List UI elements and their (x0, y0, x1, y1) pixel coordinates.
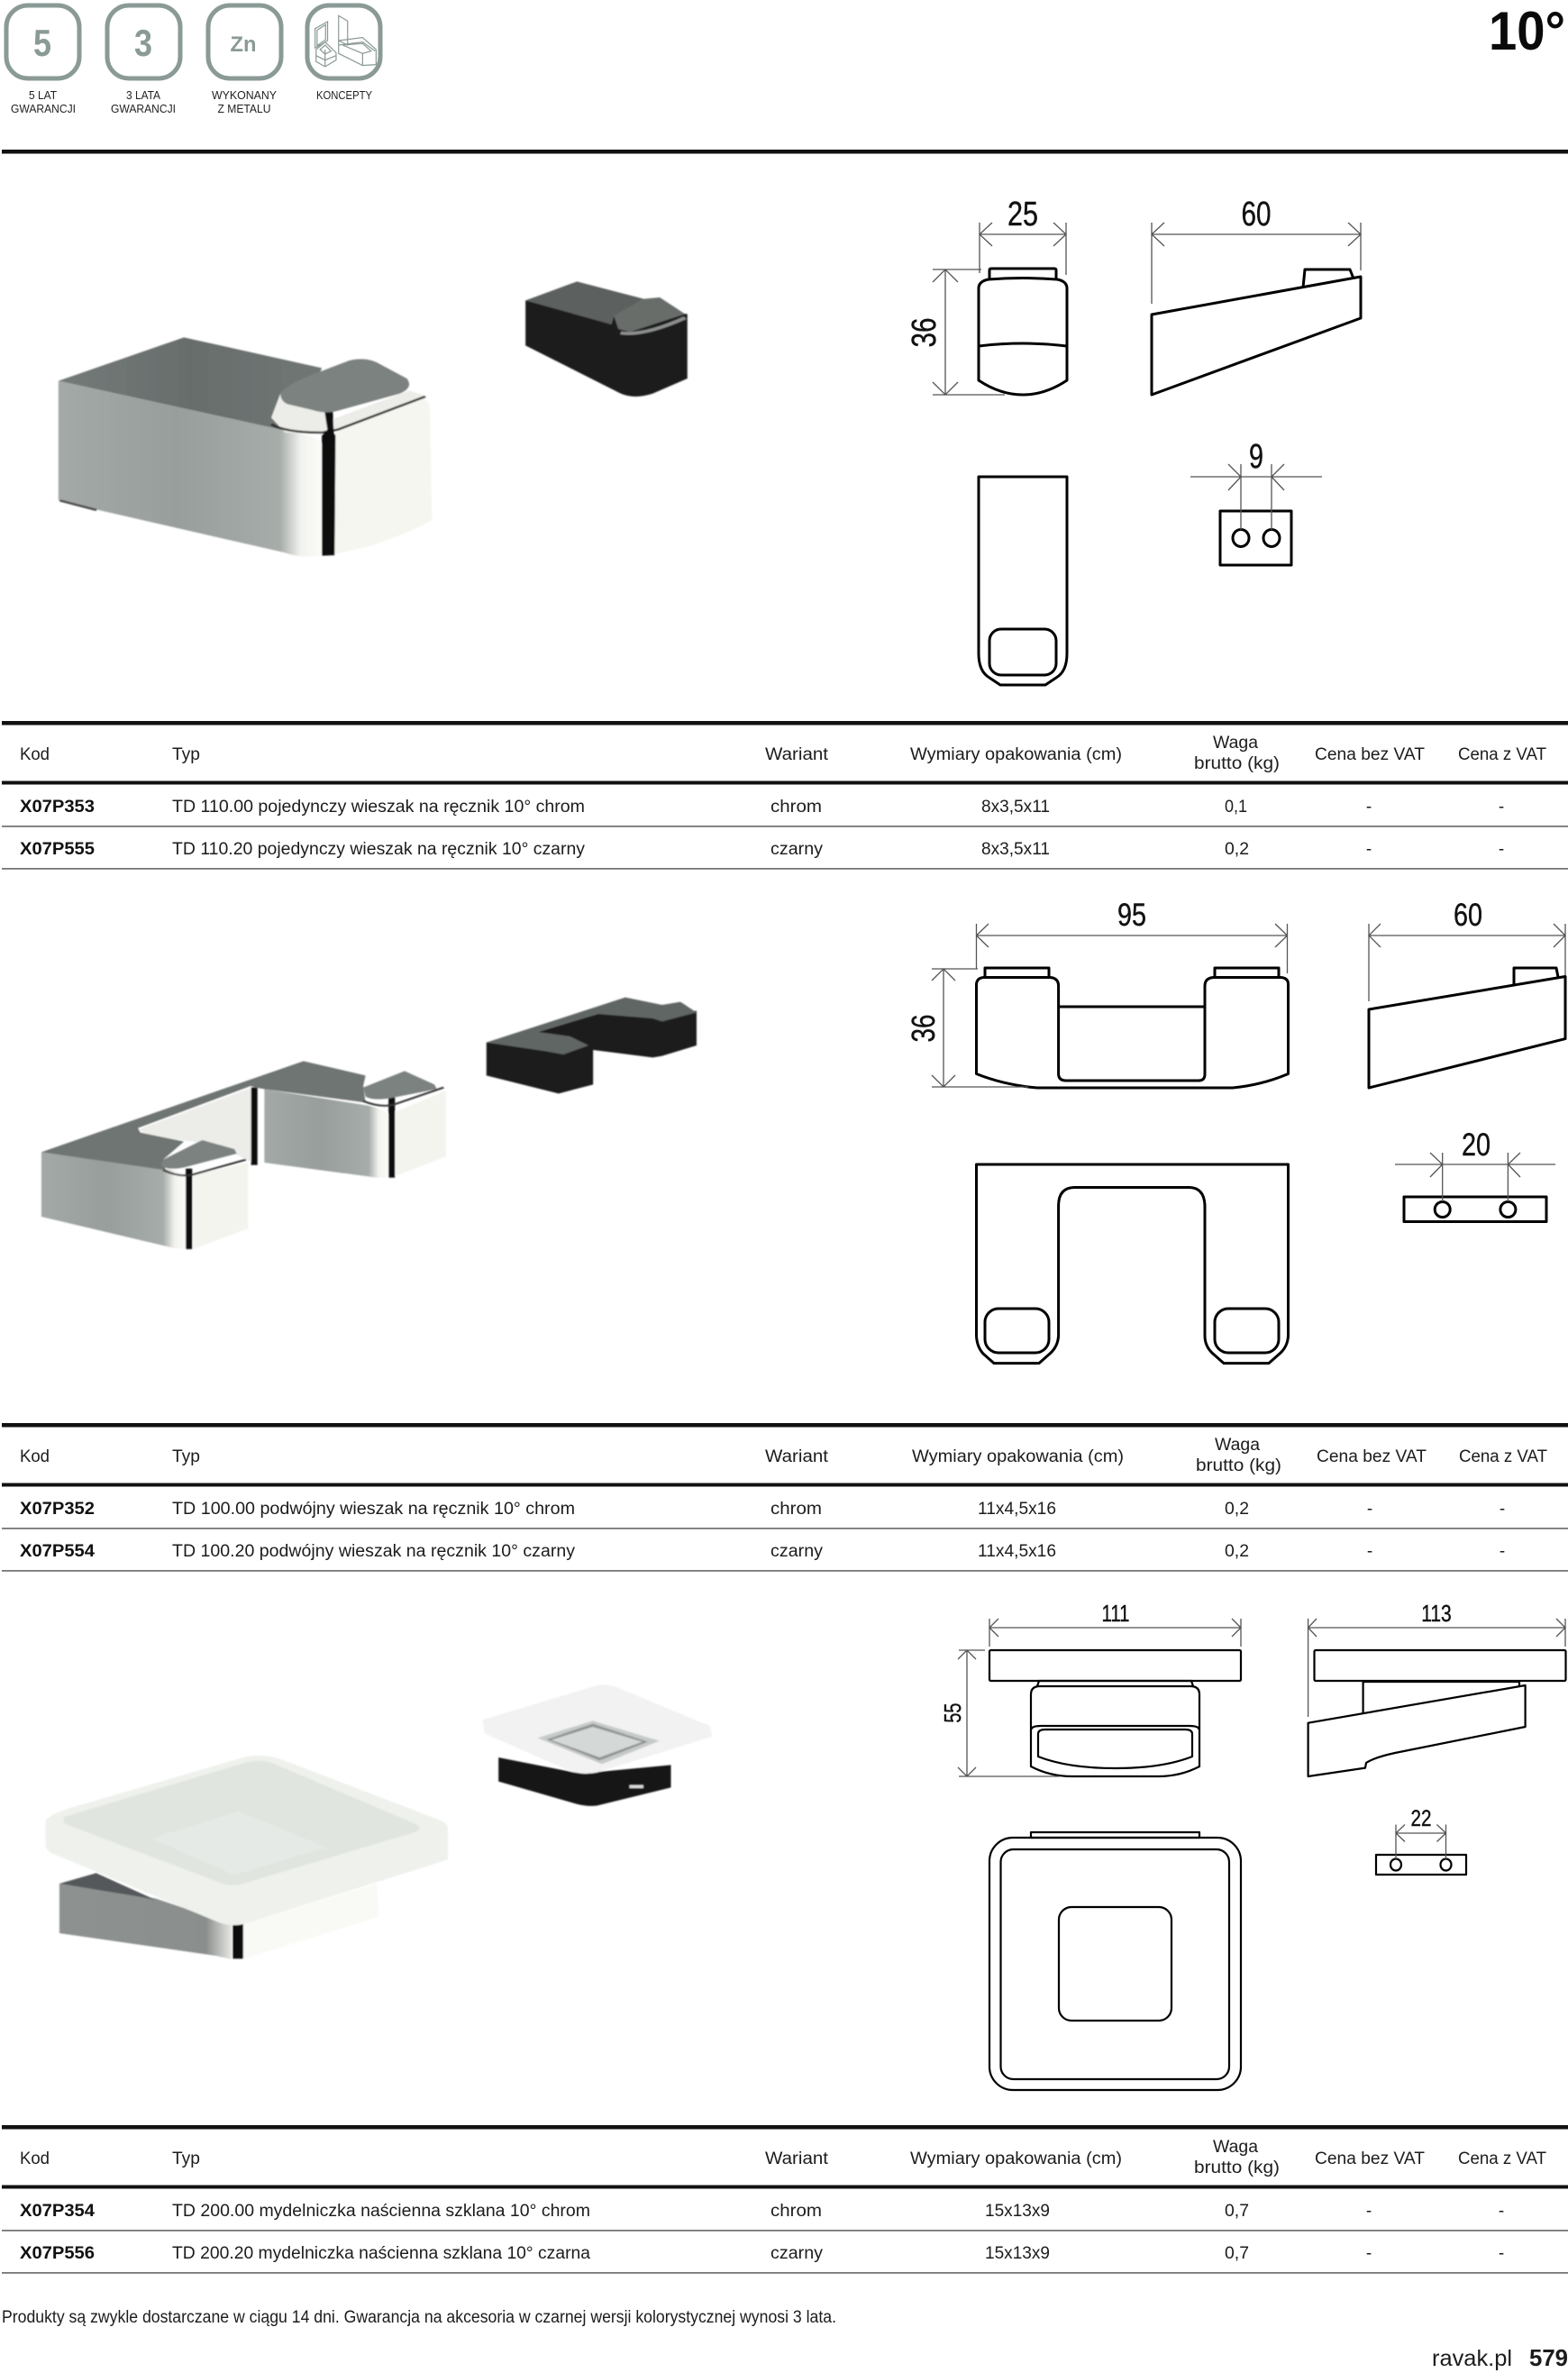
row X07P556: czarny (770, 2244, 824, 2263)
mounting plate with dimension 20: 20 (1462, 1127, 1491, 1163)
table header row: Kod (20, 1447, 50, 1466)
table header row: brutto (kg) (1194, 754, 1280, 773)
row X07P555: - (1366, 840, 1372, 859)
label: 3 lata gwarancji: 3 LATA (126, 89, 161, 102)
product photo: black double hook (487, 998, 697, 1093)
table header row: Cena bez VAT (1315, 2149, 1425, 2168)
table header row: Cena z VAT (1458, 2149, 1546, 2168)
top view (989, 1832, 1241, 2090)
table header row: Wymiary opakowania (cm) (910, 745, 1122, 764)
row X07P353: X07P353 (20, 798, 95, 817)
table header row (20, 734, 1546, 773)
row X07P353: 0,1 (1225, 798, 1247, 817)
table header row (20, 1436, 1547, 1475)
row X07P354: - (1366, 2202, 1372, 2221)
row X07P354: 15x13x9 (985, 2202, 1050, 2221)
row X07P556: X07P556 (20, 2244, 95, 2263)
front view with dimensions 111 and 55 (939, 1600, 1241, 1776)
row X07P352: - (1500, 1500, 1505, 1519)
mounting plate with dimension 9 (1190, 438, 1322, 565)
row X07P554: 11x4,5x16 (978, 1542, 1056, 1561)
row X07P555: X07P555 (20, 840, 95, 859)
side view with dimension 113 (1308, 1600, 1566, 1776)
front view with dimensions 95 and 36 (905, 898, 1289, 1088)
row X07P352 (20, 1500, 1505, 1519)
table header row: Cena bez VAT (1315, 745, 1425, 764)
website address: ravak.pl (1432, 2346, 1512, 2371)
icon: 5 years warranty: 5 (33, 22, 51, 64)
row X07P555 (20, 840, 1504, 859)
row X07P353 (20, 798, 1504, 817)
table header row: Wariant (765, 2149, 829, 2168)
row X07P556: - (1499, 2244, 1504, 2263)
table: single hook (2, 721, 1568, 870)
table header row: Waga (1213, 2138, 1258, 2157)
drawing: double hook technical views (905, 898, 1565, 1364)
table header row: Cena bez VAT (1317, 1447, 1427, 1466)
row X07P354: TD 200.00 mydelniczka naścienna szklana 10° chrom (172, 2202, 590, 2221)
label: 3 lata gwarancji: GWARANCJI (111, 103, 176, 115)
table header row: Wariant (765, 745, 829, 764)
page number: 579 (1529, 2344, 1568, 2371)
table header row: Cena z VAT (1458, 745, 1546, 764)
row X07P554: TD 100.20 podwójny wieszak na ręcznik 10° czarny (172, 1542, 576, 1561)
icon: concepts bathroom (307, 5, 380, 78)
front view with dimensions 111 and 55: 55 (939, 1703, 966, 1723)
mounting plate with dimension 22: 22 (1411, 1806, 1431, 1831)
row X07P555: czarny (770, 840, 824, 859)
side view with dimension 113: 113 (1421, 1600, 1452, 1627)
row X07P354 (20, 2202, 1504, 2221)
front view with dimensions 25 and 36 (906, 196, 1067, 395)
table: double hook (2, 1423, 1568, 1572)
front view with dimensions 25 and 36: 36 (906, 317, 944, 348)
row X07P352: - (1367, 1500, 1372, 1519)
row X07P555: - (1499, 840, 1504, 859)
row X07P555: 0,2 (1225, 840, 1249, 859)
panel: feature icons (6, 5, 380, 115)
drawing: single hook technical views (906, 196, 1361, 685)
row X07P353: TD 110.00 pojedynczy wieszak na ręcznik 10° chrom (172, 798, 585, 817)
top view (977, 1164, 1289, 1364)
row X07P353: chrom (770, 798, 822, 817)
row X07P354: - (1499, 2202, 1504, 2221)
table header row: Waga (1213, 734, 1258, 753)
table header row: Typ (172, 2149, 200, 2168)
side view with dimension 60: 60 (1242, 196, 1271, 233)
table header row: brutto (kg) (1196, 1456, 1281, 1475)
mounting plate with dimension 9: 9 (1249, 438, 1263, 476)
product photo: chrome soap dish (46, 1756, 448, 1959)
front view with dimensions 95 and 36: 95 (1117, 898, 1146, 933)
top view (979, 477, 1067, 685)
row X07P556: - (1366, 2244, 1372, 2263)
row X07P555: 8x3,5x11 (981, 840, 1050, 859)
row X07P352: TD 100.00 podwójny wieszak na ręcznik 10° chrom (172, 1500, 575, 1519)
table: soap dish (2, 2125, 1568, 2274)
table header row: Cena z VAT (1459, 1447, 1547, 1466)
mounting plate with dimension 22 (1376, 1806, 1466, 1875)
side view with dimension 60: 60 (1454, 898, 1482, 933)
side view with dimension 60 (1152, 196, 1361, 395)
icon: 3 years warranty (107, 5, 180, 78)
label: 5 lat gwarancji: 5 LAT (29, 89, 57, 102)
row X07P554 (20, 1542, 1505, 1561)
row X07P353: - (1366, 798, 1372, 817)
row X07P352: X07P352 (20, 1500, 95, 1519)
row X07P352: 11x4,5x16 (978, 1500, 1056, 1519)
row X07P556: 15x13x9 (985, 2244, 1050, 2263)
row X07P354: X07P354 (20, 2202, 95, 2221)
label: wykonany z metalu: WYKONANY (212, 89, 278, 102)
table header row: Wymiary opakowania (cm) (912, 1447, 1124, 1466)
row X07P556: TD 200.20 mydelniczka naścienna szklana 10° czarna (172, 2244, 590, 2263)
row X07P353: - (1499, 798, 1504, 817)
icon: 5 years warranty (6, 5, 79, 78)
side view with dimension 60 (1369, 898, 1565, 1088)
drawing: soap dish technical views (939, 1600, 1566, 2090)
label: 5 lat gwarancji: GWARANCJI (11, 103, 76, 115)
row X07P554: X07P554 (20, 1542, 95, 1561)
icon: 3 years warranty: 3 (134, 22, 152, 64)
product photo: black single hook (525, 281, 688, 397)
footnote: Produkty są zwykle dostarczane w ciągu 14 dni. Gwarancja na akcesoria w czarnej wersji kolorystycznej wynosi 3 lata. (2, 2308, 836, 2327)
row X07P352: chrom (770, 1500, 822, 1519)
front view with dimensions 111 and 55: 111 (1101, 1600, 1130, 1627)
row X07P554: 0,2 (1225, 1542, 1249, 1561)
label: koncepty: KONCEPTY (316, 89, 373, 102)
table header row: brutto (kg) (1194, 2159, 1280, 2177)
row X07P556: 0,7 (1225, 2244, 1249, 2263)
row X07P354: 0,7 (1225, 2202, 1249, 2221)
row X07P554: - (1367, 1542, 1372, 1561)
product photo: chrome single hook (59, 337, 433, 556)
label: wykonany z metalu: Z METALU (218, 103, 270, 115)
icon: zinc metal: Zn (231, 32, 256, 57)
row X07P554: czarny (770, 1542, 824, 1561)
icon: zinc metal (208, 5, 281, 78)
table header row: Kod (20, 745, 50, 764)
table header row: Typ (172, 745, 200, 764)
row X07P353: 8x3,5x11 (981, 798, 1050, 817)
table header row: Wariant (765, 1447, 829, 1466)
row X07P554: - (1500, 1542, 1505, 1561)
table header row: Waga (1215, 1436, 1260, 1455)
product photo: black soap dish (482, 1684, 712, 1806)
front view with dimensions 25 and 36: 25 (1007, 196, 1038, 233)
row X07P354: chrom (770, 2202, 822, 2221)
table header row: Typ (172, 1447, 200, 1466)
front view with dimensions 95 and 36: 36 (905, 1015, 942, 1042)
mounting plate with dimension 20 (1395, 1127, 1555, 1222)
table header row: Kod (20, 2149, 50, 2168)
row X07P555: TD 110.20 pojedynczy wieszak na ręcznik 10° czarny (172, 840, 586, 859)
table header row (20, 2138, 1546, 2177)
table header row: Wymiary opakowania (cm) (910, 2149, 1122, 2168)
row X07P556 (20, 2244, 1504, 2263)
row X07P352: 0,2 (1225, 1500, 1249, 1519)
product photo: chrome double hook (41, 1061, 446, 1249)
